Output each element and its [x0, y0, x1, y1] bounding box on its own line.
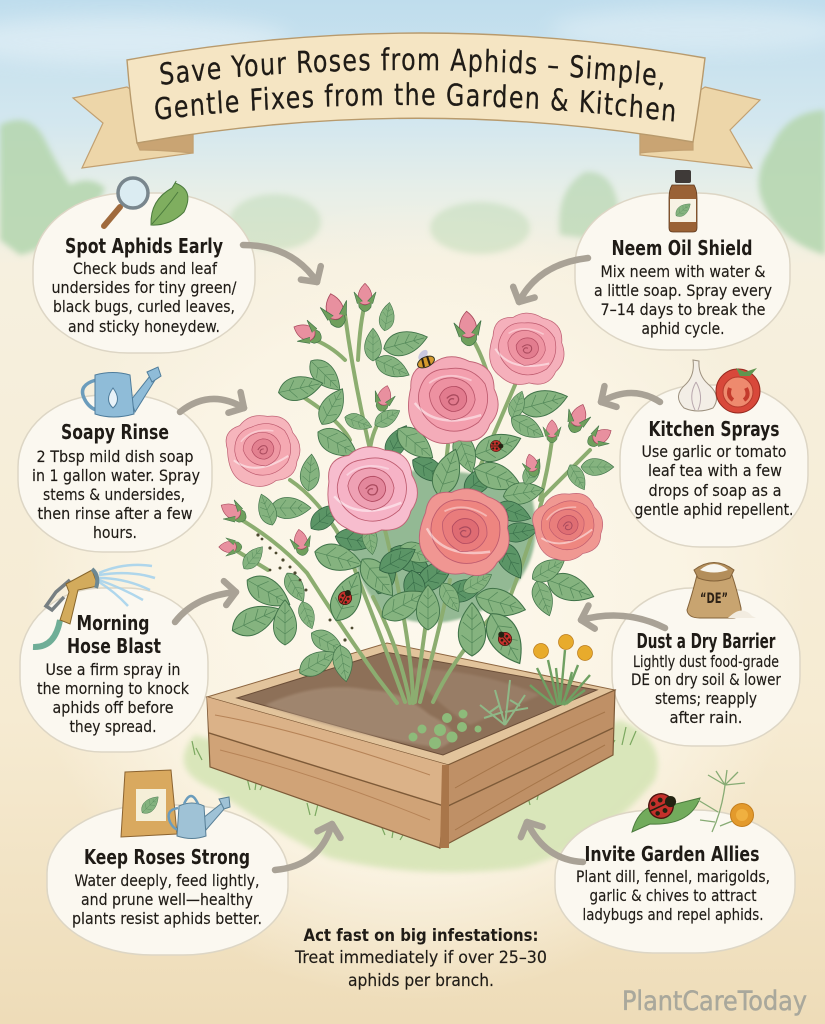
- banner title: [72, 32, 762, 169]
- aphid clusters on stem: [256, 533, 353, 642]
- title line one: Save Your Roses from Aphids – Simple,: [160, 47, 663, 90]
- body text: and sticky honeydew.: [68, 317, 220, 336]
- panel: keep roses strong: [47, 770, 288, 955]
- body text: Check buds and leaf: [73, 259, 217, 278]
- body text: ladybugs and repel aphids.: [582, 905, 764, 924]
- body text: Lightly dust food-grade: [633, 652, 779, 671]
- body text: aphids off before: [52, 698, 174, 717]
- body text: [634, 442, 794, 519]
- body text: plants resist aphids better.: [72, 909, 262, 928]
- panel: kitchen sprays: [620, 360, 808, 547]
- body text: [631, 652, 781, 727]
- buds: [216, 283, 616, 557]
- body text: stems; reapply: [655, 689, 757, 708]
- icon: garlic: [678, 360, 717, 411]
- callout: act fast: [294, 926, 547, 990]
- body text: garlic & chives to attract: [590, 886, 756, 905]
- body text: the morning to knock: [37, 679, 190, 698]
- rose: light pink centre: [328, 447, 417, 534]
- icon: small watering can: [169, 796, 230, 838]
- heading: Hose Blast: [67, 634, 161, 658]
- icon: watering can: [82, 367, 161, 417]
- arrow: dust to rose: [581, 616, 665, 628]
- body text: drops of soap as a: [648, 481, 782, 500]
- arrow: neem oil to rose: [519, 258, 588, 302]
- planter rim: [207, 643, 615, 765]
- planter front-left boards: [207, 697, 448, 848]
- arrow: keep roses strong to planter: [275, 824, 332, 870]
- body text: they spread.: [70, 717, 156, 736]
- panel: invite garden allies: [555, 770, 795, 953]
- body text: [576, 867, 770, 924]
- herb seedlings: [408, 710, 482, 749]
- icon: marigold: [730, 804, 754, 826]
- body text: Plant dill, fennel, marigolds,: [576, 867, 770, 886]
- body text: DE on dry soil & lower: [631, 670, 781, 689]
- panel: dust a dry barrier: [612, 562, 800, 746]
- body text: Use garlic or tomato: [642, 442, 786, 461]
- body text: leaf tea with a few: [648, 461, 782, 480]
- icon: magnifier: [104, 178, 148, 226]
- icon: fennel: [698, 770, 745, 832]
- panel: soapy rinse: [18, 367, 212, 552]
- body text: Use a firm spray in: [46, 660, 180, 679]
- distant green hedges: [0, 110, 825, 255]
- rose bush: [216, 283, 616, 703]
- body text: [37, 660, 190, 736]
- heading: [67, 611, 161, 658]
- rose: coral centre: [411, 479, 520, 586]
- grass under planter: [184, 720, 658, 872]
- callout: act fast: aphids per branch.: [348, 971, 494, 990]
- icon: DE sack: [687, 562, 756, 618]
- rose: coral right: [527, 485, 610, 567]
- body text: hours.: [93, 523, 137, 542]
- body text: a little soap. Spray every: [594, 281, 772, 300]
- body text: 7–14 days to break the: [600, 300, 766, 319]
- body text: [52, 259, 237, 336]
- body text: black bugs, curled leaves,: [53, 297, 235, 316]
- heading: Kitchen Sprays: [648, 417, 780, 441]
- bee: [416, 348, 436, 370]
- body text: and prune well—healthy: [81, 890, 253, 909]
- body text: [594, 262, 772, 338]
- title line two: Gentle Fixes from the Garden & Kitchen: [155, 82, 674, 122]
- heading: Invite Garden Allies: [584, 842, 760, 866]
- marigold plant: [530, 634, 592, 705]
- icon: fertilizer bag: [121, 770, 177, 837]
- arrow: spot aphids to rose: [243, 245, 317, 282]
- raised wooden planter: [207, 634, 615, 848]
- body text: aphid cycle.: [642, 319, 724, 338]
- body text: in 1 gallon water. Spray: [32, 466, 200, 485]
- body text: stems & undersides,: [43, 485, 185, 504]
- body text: after rain.: [670, 708, 742, 727]
- heading: Soapy Rinse: [61, 420, 169, 444]
- body text: then rinse after a few: [38, 504, 192, 523]
- icon: ladybug on leaf: [632, 788, 700, 832]
- heading: Morning: [76, 611, 150, 635]
- callout: act fast: Treat immediately if over 25–30: [294, 948, 547, 967]
- ladybugs on leaves: [336, 440, 514, 648]
- body text: undersides for tiny green/: [52, 278, 237, 297]
- panel: neem oil shield: [575, 170, 790, 350]
- watermark: PlantCareToday: [622, 986, 807, 1017]
- arrow: kitchen sprays to rose: [601, 393, 660, 402]
- stems: [232, 300, 590, 703]
- icon: hose nozzle: [33, 569, 98, 647]
- icon: leaf: [151, 181, 188, 225]
- dark foliage mass: [348, 470, 536, 623]
- arrow: soapy rinse to rose: [180, 399, 244, 412]
- banner body: [127, 33, 705, 143]
- panel: morning hose blast: [20, 565, 208, 752]
- leaves: [227, 301, 614, 683]
- icon: water spray: [99, 565, 155, 606]
- icon: DE sack: “DE”: [700, 591, 728, 607]
- banner ribbon tails: [73, 87, 760, 168]
- body text: [32, 447, 200, 542]
- heading: Neem Oil Shield: [612, 236, 752, 260]
- body text: [72, 871, 262, 928]
- fern herb: [480, 680, 528, 725]
- arrow: hose blast to rose: [175, 592, 236, 622]
- body text: Mix neem with water &: [600, 262, 766, 281]
- planter right boards: [440, 690, 615, 848]
- body text: 2 Tbsp mild dish soap: [36, 447, 194, 466]
- body text: gentle aphid repellent.: [634, 500, 794, 519]
- soil: [237, 652, 597, 755]
- icon: neem oil bottle: [669, 170, 697, 232]
- heading: Spot Aphids Early: [65, 234, 223, 258]
- rose: top centre pink: [405, 353, 502, 448]
- icon: tomato: [716, 368, 760, 413]
- body text: Water deeply, feed lightly,: [74, 871, 260, 890]
- heading: Keep Roses Strong: [84, 845, 250, 869]
- callout: act fast: Act fast on big infestations:: [304, 926, 538, 945]
- rose: upper right pink: [485, 307, 570, 392]
- arrow: garden allies to planter: [527, 822, 583, 862]
- rose: left pink: [222, 409, 305, 491]
- panel: spot aphids early: [33, 178, 255, 353]
